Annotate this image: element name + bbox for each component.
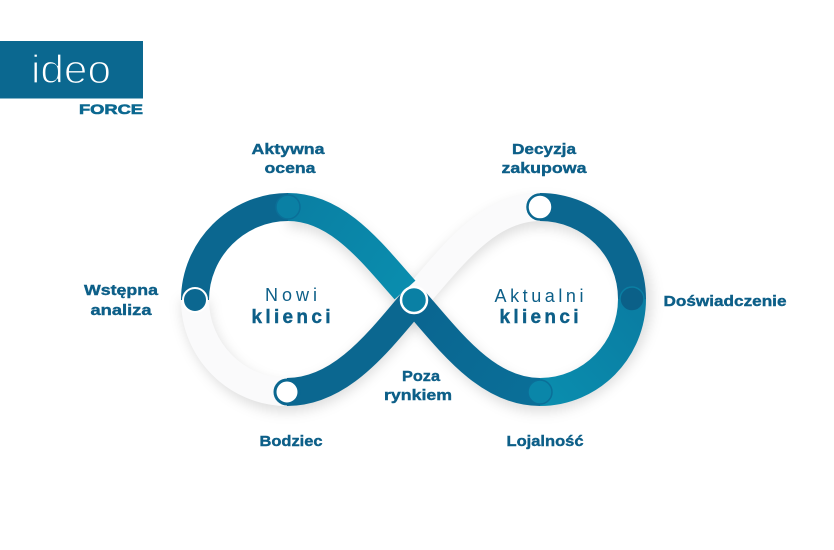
node: bottom right [528, 380, 552, 404]
label: Bodziec: Bodziec [260, 433, 322, 450]
label: Wstępna analiza [84, 282, 159, 319]
center label: new clients [252, 285, 330, 328]
band: teal bottom right arc [540, 299, 632, 392]
center label: current clients: klienci [500, 307, 578, 328]
label: Lojalność: Lojalność [506, 433, 584, 450]
logo wordmark: ideo [31, 48, 111, 92]
label: Aktywna ocena: Aktywna [252, 141, 325, 158]
node: left [183, 288, 207, 312]
label: Decyzja zakupowa: zakupowa [502, 160, 587, 177]
label: Aktywna ocena [252, 141, 325, 177]
node: top left [276, 195, 300, 219]
label: Poza rynkiem [384, 368, 452, 404]
label: Wstępna analiza: Wstępna [84, 282, 159, 299]
band: dark top right arc [540, 207, 632, 299]
label: Decyzja zakupowa: Decyzja [512, 141, 577, 158]
logo background [0, 41, 143, 98]
node: top right [528, 194, 552, 220]
infinity diagram [183, 194, 644, 404]
node: bottom left [275, 380, 299, 404]
band: bottom left [287, 300, 414, 392]
center label: new clients: Nowi [265, 285, 317, 305]
center label: new clients: klienci [252, 307, 330, 328]
center label: current clients [494, 286, 584, 328]
band: teal top left [288, 207, 405, 290]
label: Wstępna analiza: analiza [90, 302, 152, 319]
label: Doświadczenie: Doświadczenie [664, 293, 786, 310]
node: center [401, 287, 427, 313]
white band: left lower [195, 300, 287, 392]
label: Poza rynkiem: Poza [402, 368, 441, 385]
label: Aktywna ocena: ocena [264, 160, 316, 177]
center label: current clients: Aktualni [494, 286, 584, 306]
logo: ideo force [0, 41, 143, 117]
logo subtitle: FORCE [79, 101, 143, 117]
band: bottom right [414, 300, 540, 392]
white band: right upper [414, 207, 540, 300]
band: dark top left arc [195, 207, 288, 300]
band shadows [195, 213, 638, 398]
label: Poza rynkiem: rynkiem [384, 387, 452, 404]
label: Decyzja zakupowa [502, 141, 587, 177]
node: right [620, 287, 644, 311]
